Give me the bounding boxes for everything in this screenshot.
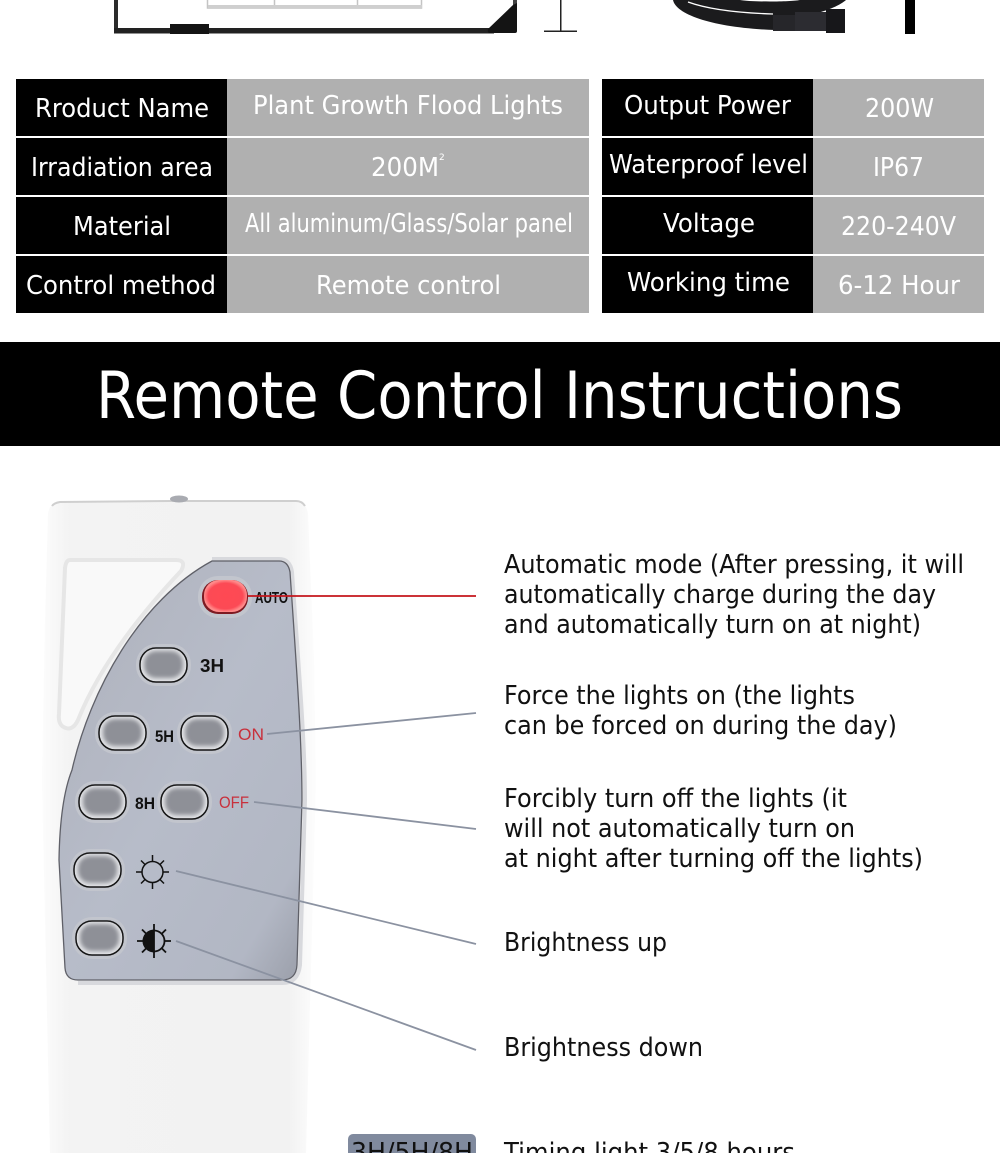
top edge <box>52 501 305 506</box>
specification table left: Plant Growth Flood Lights <box>253 91 563 121</box>
dimension marker <box>544 0 577 32</box>
remote control illustration <box>42 496 316 1153</box>
button: 3H <box>136 644 191 686</box>
specification table right: 220-240V <box>841 212 956 242</box>
callout line: auto <box>248 595 476 597</box>
specification table left: All aluminum/Glass/Solar panel <box>245 209 573 239</box>
button: ON <box>177 712 232 754</box>
specification table right <box>602 79 984 313</box>
button labels: 3H <box>200 656 224 676</box>
description: force off: at night after turning off the lights) <box>504 844 923 874</box>
specification table right: 6-12 Hour <box>838 271 960 301</box>
button: 8H <box>75 781 130 823</box>
specification table left <box>16 79 589 313</box>
specification table right: Output Power <box>624 91 791 121</box>
specification table left: Remote control <box>316 271 501 301</box>
button labels: OFF <box>219 793 249 812</box>
specification table right: Waterproof level <box>609 150 808 180</box>
description: force on: can be forced on during the day) <box>504 711 897 741</box>
silver button panel <box>59 561 302 980</box>
callout line: off <box>254 802 476 829</box>
description: force off: will not automatically turn on <box>504 814 855 844</box>
black power cable with connector <box>673 0 846 33</box>
description: automatic mode: and automatically turn on at night) <box>504 610 921 640</box>
specification table left: Irradiation area <box>31 153 213 183</box>
specification table left: Rroduct Name <box>35 94 209 124</box>
button labels: 5H <box>155 727 174 746</box>
description: automatic mode <box>504 550 964 640</box>
button labels: AUTO <box>255 590 288 607</box>
panel bevel <box>78 559 305 983</box>
callout line: brightness up <box>176 871 476 944</box>
remote body <box>42 500 316 1153</box>
black bar <box>905 0 915 34</box>
section banner heading <box>0 342 1000 446</box>
button labels <box>135 590 288 813</box>
icon: sun outline <box>136 855 169 889</box>
button labels: ON <box>238 725 264 744</box>
button: OFF <box>157 781 212 823</box>
specification table left: 2 <box>439 153 445 163</box>
icon: half filled sun <box>137 924 171 958</box>
button labels: 8H <box>135 794 155 813</box>
description: force off: Forcibly turn off the lights (it <box>504 784 847 814</box>
callout line: on <box>267 713 476 734</box>
description: force on <box>504 681 897 741</box>
specification table left: 200M <box>371 153 439 183</box>
button: brightness down <box>72 917 127 959</box>
specification table right: 200W <box>865 94 934 124</box>
description: automatic mode: Automatic mode (After pressing, it will <box>504 550 964 580</box>
specification table right: IP67 <box>873 153 924 183</box>
description: force on: Force the lights on (the lights <box>504 681 855 711</box>
raised corner outline <box>59 560 183 728</box>
description: automatic mode: automatically charge during the day <box>504 580 936 610</box>
specification table left: Material <box>73 212 171 242</box>
top sensor nub <box>170 496 188 502</box>
description: brightness up: Brightness up <box>504 928 667 958</box>
description: brightness down: Brightness down <box>504 1033 703 1063</box>
button: auto <box>198 576 252 618</box>
callout line: brightness down <box>176 941 476 1050</box>
product dimension drawing: housing outline <box>114 0 517 34</box>
specification table left: Control method <box>26 271 216 301</box>
button: 5H <box>95 712 150 754</box>
description: force off <box>504 784 923 874</box>
specification table right: Working time <box>627 268 790 298</box>
section banner heading: Remote Control Instructions <box>96 359 903 434</box>
specification table right: Voltage <box>663 209 755 239</box>
button: brightness up <box>70 849 125 891</box>
